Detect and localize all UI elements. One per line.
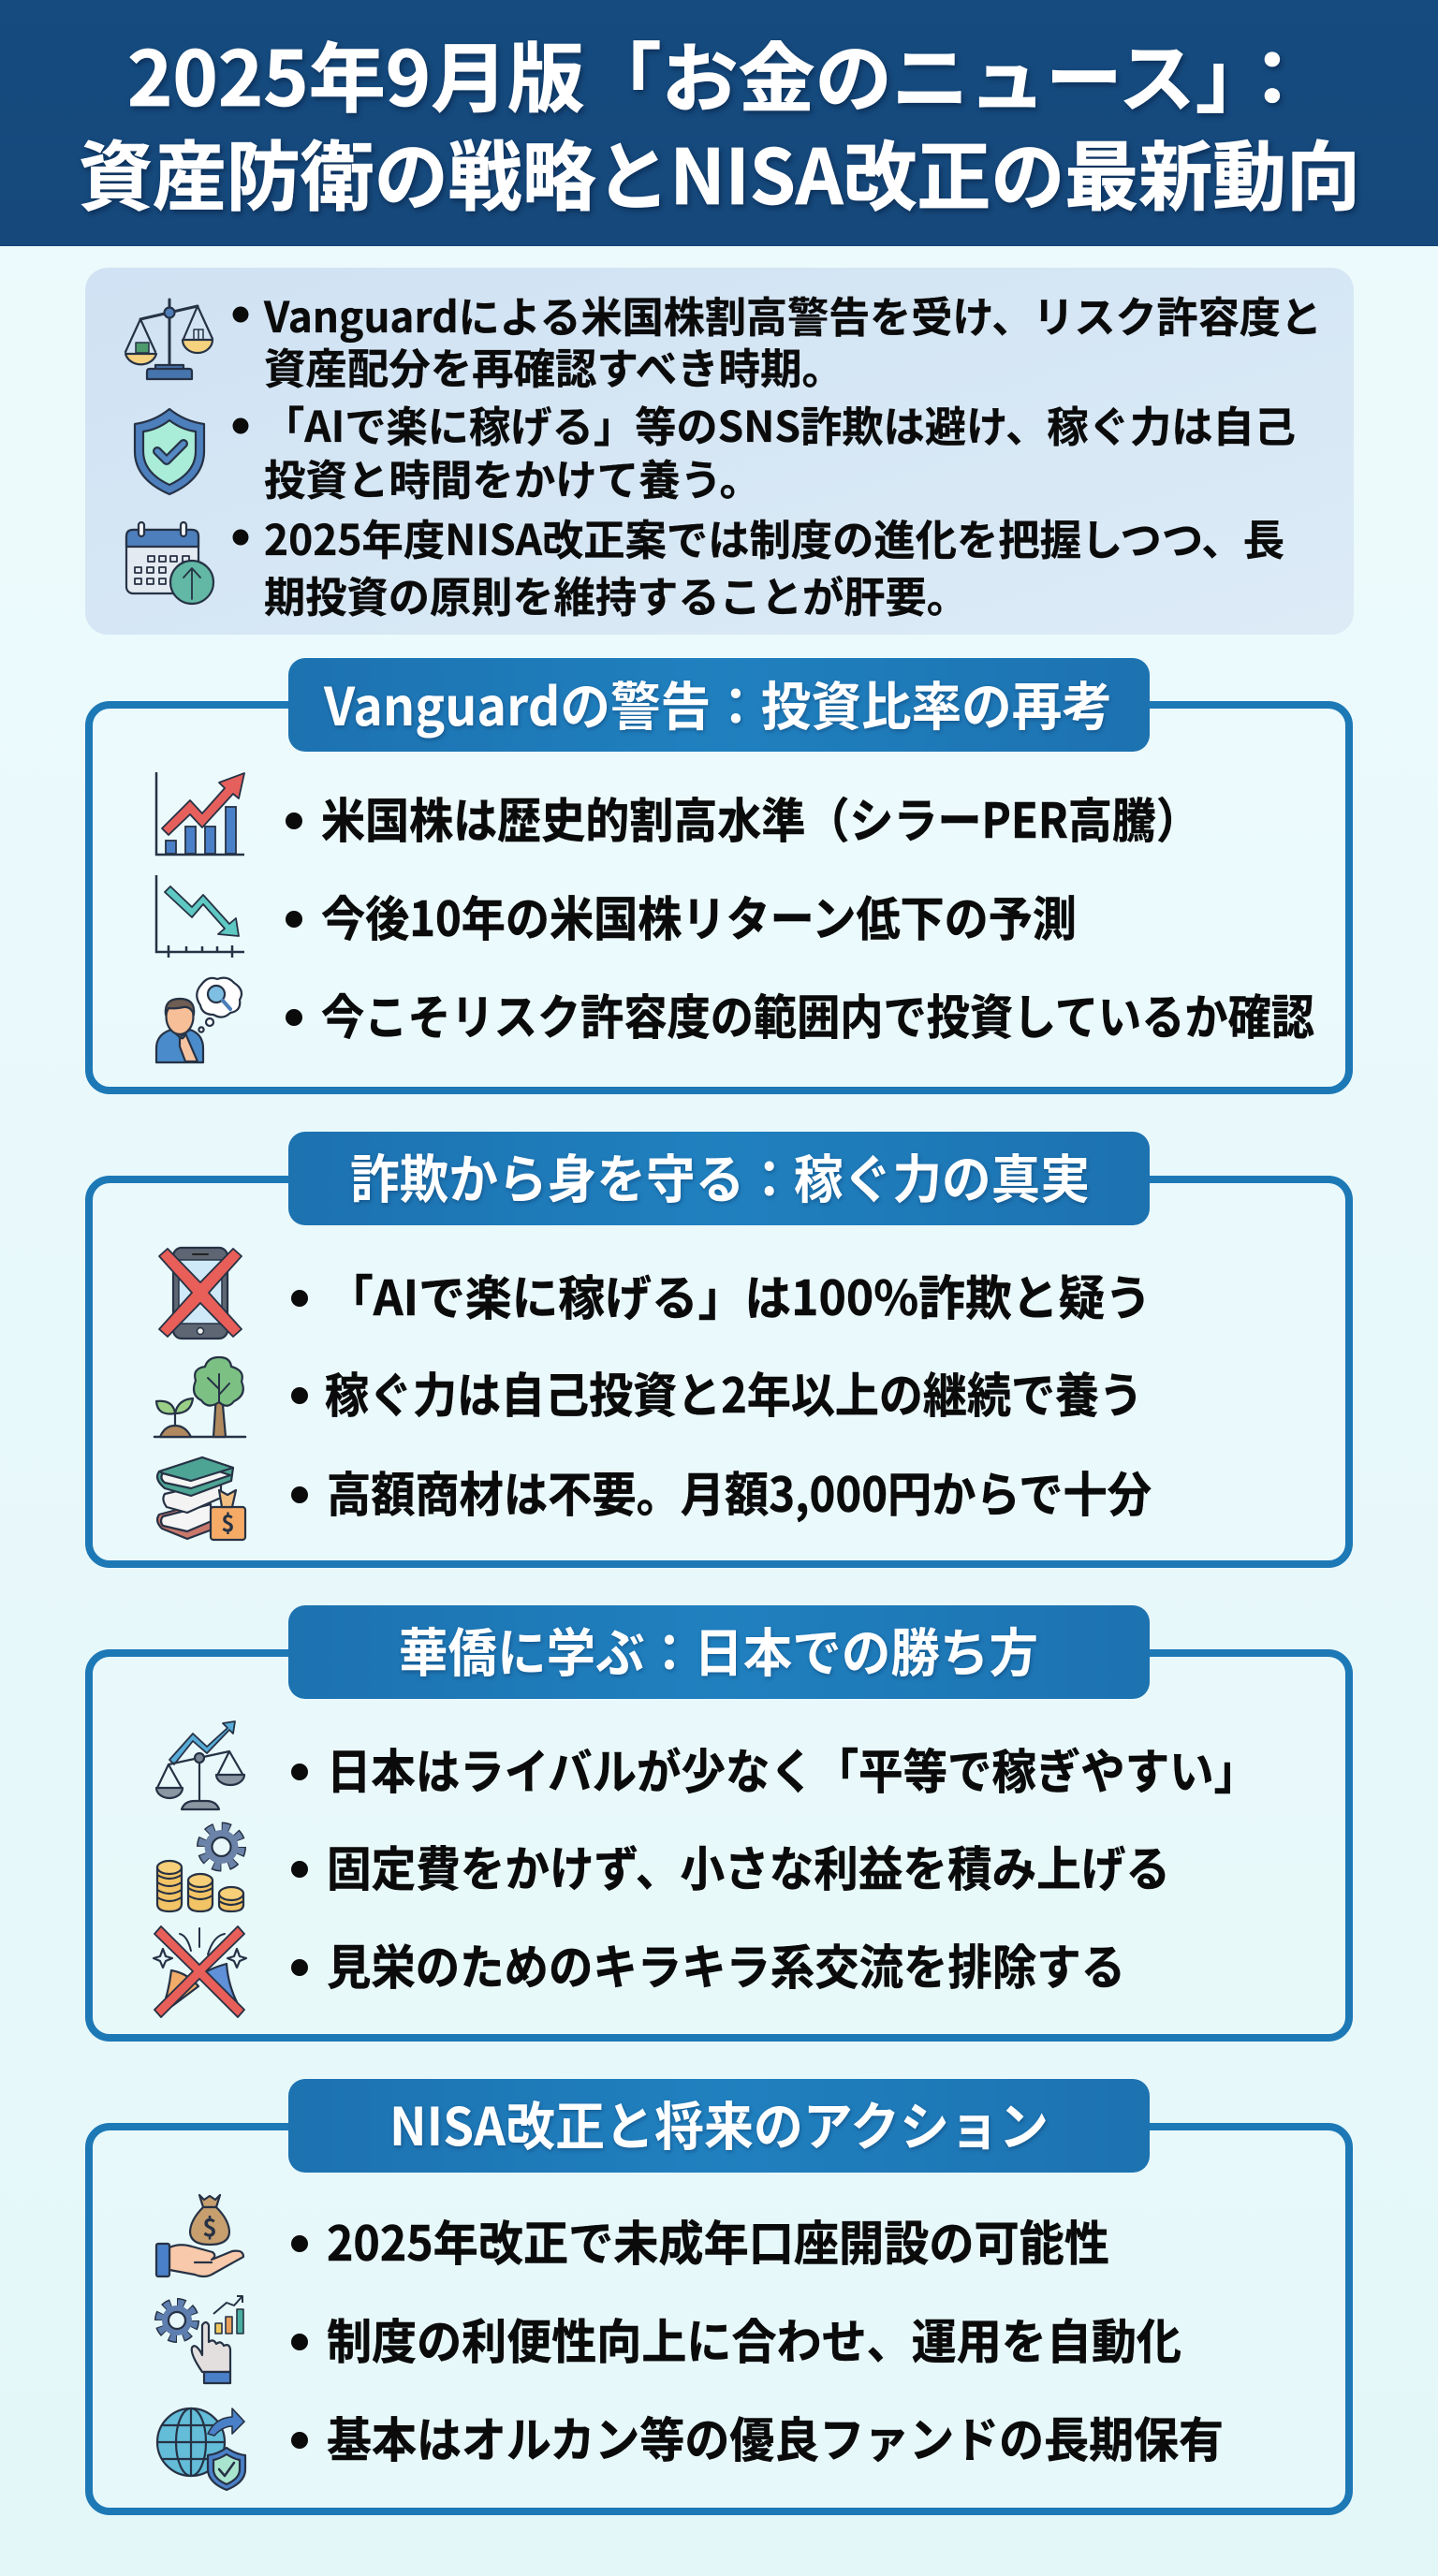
panel: scam protection — [89, 1132, 1349, 1564]
title — [79, 19, 1360, 227]
heading tab — [288, 1605, 1150, 1699]
icon: hand with money bag — [156, 2195, 243, 2276]
icon: balance scale — [125, 300, 213, 379]
bullet texts: 高額商材は不要。月額3,000円からで十分 — [327, 1456, 1152, 1526]
heading tab — [288, 2079, 1150, 2173]
bullet texts: 「AIで楽に稼げる」は100%詐欺と疑う — [327, 1260, 1152, 1329]
icon: rising chart — [156, 772, 244, 855]
bullet texts — [325, 1260, 1152, 1526]
bullets — [286, 812, 302, 1026]
bullet texts: 固定費をかけず、小さな利益を積み上げる — [327, 1831, 1170, 1900]
summary text: 投資と時間をかけて養う。 — [264, 446, 761, 507]
icon: thinking person — [156, 978, 242, 1062]
icon: crossed party poppers — [154, 1926, 246, 2017]
bullet texts: 見栄のためのキラキラ系交流を排除する — [327, 1929, 1125, 1998]
bullet texts — [327, 2205, 1224, 2471]
icon: hand with money bag: $ — [202, 2209, 217, 2244]
icon: calendar with arrow — [126, 522, 213, 604]
summary text: 2025年度NISA改正案では制度の進化を把握しつつ、長 — [264, 506, 1284, 567]
bullets — [291, 1764, 308, 1976]
summary text: Vanguardによる米国株割高警告を受け、リスク許容度と — [263, 284, 1322, 344]
panel: summary — [85, 268, 1354, 635]
heading tab: NISA改正と将来のアクション — [389, 2086, 1049, 2161]
panel: overseas Chinese lessons — [89, 1605, 1349, 2038]
heading tab: 華僑に学ぶ：日本での勝ち方 — [399, 1612, 1038, 1688]
heading tab: Vanguardの警告：投資比率の再考 — [323, 666, 1112, 741]
icon: books and money bag — [157, 1457, 245, 1540]
header band — [0, 0, 1438, 246]
panel: Vanguard warning — [89, 658, 1349, 1090]
bullet texts: 今後10年の米国株リターン低下の予測 — [321, 881, 1077, 950]
bullets — [291, 2235, 308, 2449]
panel: NISA reform and actions — [89, 2079, 1349, 2511]
summary text: 「AIで楽に稼げる」等のSNS詐欺は避け、稼ぐ力は自己 — [263, 393, 1296, 454]
icon: scale with arrow — [156, 1721, 244, 1809]
bullet texts: 稼ぐ力は自己投資と2年以上の継続で養う — [325, 1357, 1143, 1427]
title: 2025年9月版「お金のニュース」： — [127, 19, 1311, 128]
icon: falling chart — [156, 875, 244, 958]
icon: books and money bag: $ — [221, 1505, 235, 1538]
summary bullets — [232, 307, 249, 545]
icon: crossed phone — [159, 1248, 242, 1339]
bullet texts: 基本はオルカン等の優良ファンドの長期保有 — [327, 2402, 1224, 2471]
summary text: 資産配分を再確認すべき時期。 — [264, 335, 844, 396]
bullet texts — [321, 783, 1314, 1048]
bullet texts: 制度の利便性向上に合わせ、運用を自動化 — [327, 2304, 1181, 2373]
icon: sprout and tree — [154, 1357, 245, 1437]
summary text — [263, 284, 1322, 624]
summary text: 期投資の原則を維持することが肝要。 — [264, 564, 968, 624]
bullet texts: 今こそリスク許容度の範囲内で投資しているか確認 — [321, 979, 1314, 1048]
icon: gear hand chart — [159, 2296, 243, 2383]
bullet texts: 米国株は歴史的割高水準（シラーPER高騰） — [321, 783, 1200, 852]
heading tab: 詐欺から身を守る：稼ぐ力の真実 — [350, 1138, 1090, 1214]
icon: coins and gear — [157, 1827, 243, 1911]
icon: shield check — [135, 409, 204, 494]
bullet texts — [327, 1734, 1258, 1998]
title: 資産防衛の戦略とNISA改正の最新動向 — [79, 117, 1360, 227]
bullet texts: 2025年改正で未成年口座開設の可能性 — [327, 2205, 1109, 2275]
bullet texts: 日本はライバルが少なく「平等で稼ぎやすい」 — [327, 1734, 1258, 1803]
bullets — [291, 1290, 308, 1503]
icon: globe with shield — [157, 2408, 245, 2490]
